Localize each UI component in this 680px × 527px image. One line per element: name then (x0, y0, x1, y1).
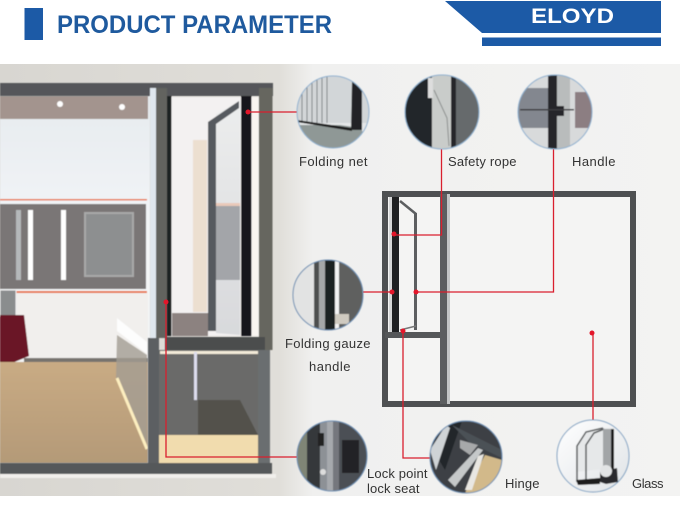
icon: folding gauze handle detail (293, 260, 363, 330)
label: folding gauze handle: handle (309, 359, 351, 374)
label: hinge: Hinge (505, 476, 540, 491)
brand banner with logo (445, 1, 661, 46)
icon: insulated glass detail (557, 420, 629, 492)
icon: lock point detail (297, 421, 367, 491)
brand banner with logo: ELOYD (531, 5, 614, 28)
label: glass: Glass (632, 476, 664, 491)
label: folding gauze handle: Folding gauze (285, 336, 371, 351)
title: PRODUCT PARAMETER (57, 11, 332, 39)
window frame (0, 83, 276, 478)
photo: window in showroom (0, 83, 276, 478)
icon: handle detail (518, 75, 592, 149)
header accent block (24, 8, 43, 40)
icon: safety rope detail (405, 75, 479, 149)
diagram: window elevation (385, 194, 633, 404)
label: lock point lock seat (367, 466, 428, 496)
icon: folding net detail (297, 76, 369, 148)
label: safety rope: Safety rope (448, 154, 517, 169)
label: folding net: Folding net (299, 154, 368, 169)
photo: interior showroom (0, 96, 150, 463)
icon: hinge detail (430, 421, 502, 493)
label: handle: Handle (572, 154, 616, 169)
label: lock point lock seat: Lock point (367, 466, 428, 481)
callout leader lines (166, 112, 593, 458)
labels (285, 154, 664, 496)
label: lock point lock seat: lock seat (367, 481, 420, 496)
callout dots (164, 110, 594, 336)
label: folding gauze handle (285, 336, 371, 374)
